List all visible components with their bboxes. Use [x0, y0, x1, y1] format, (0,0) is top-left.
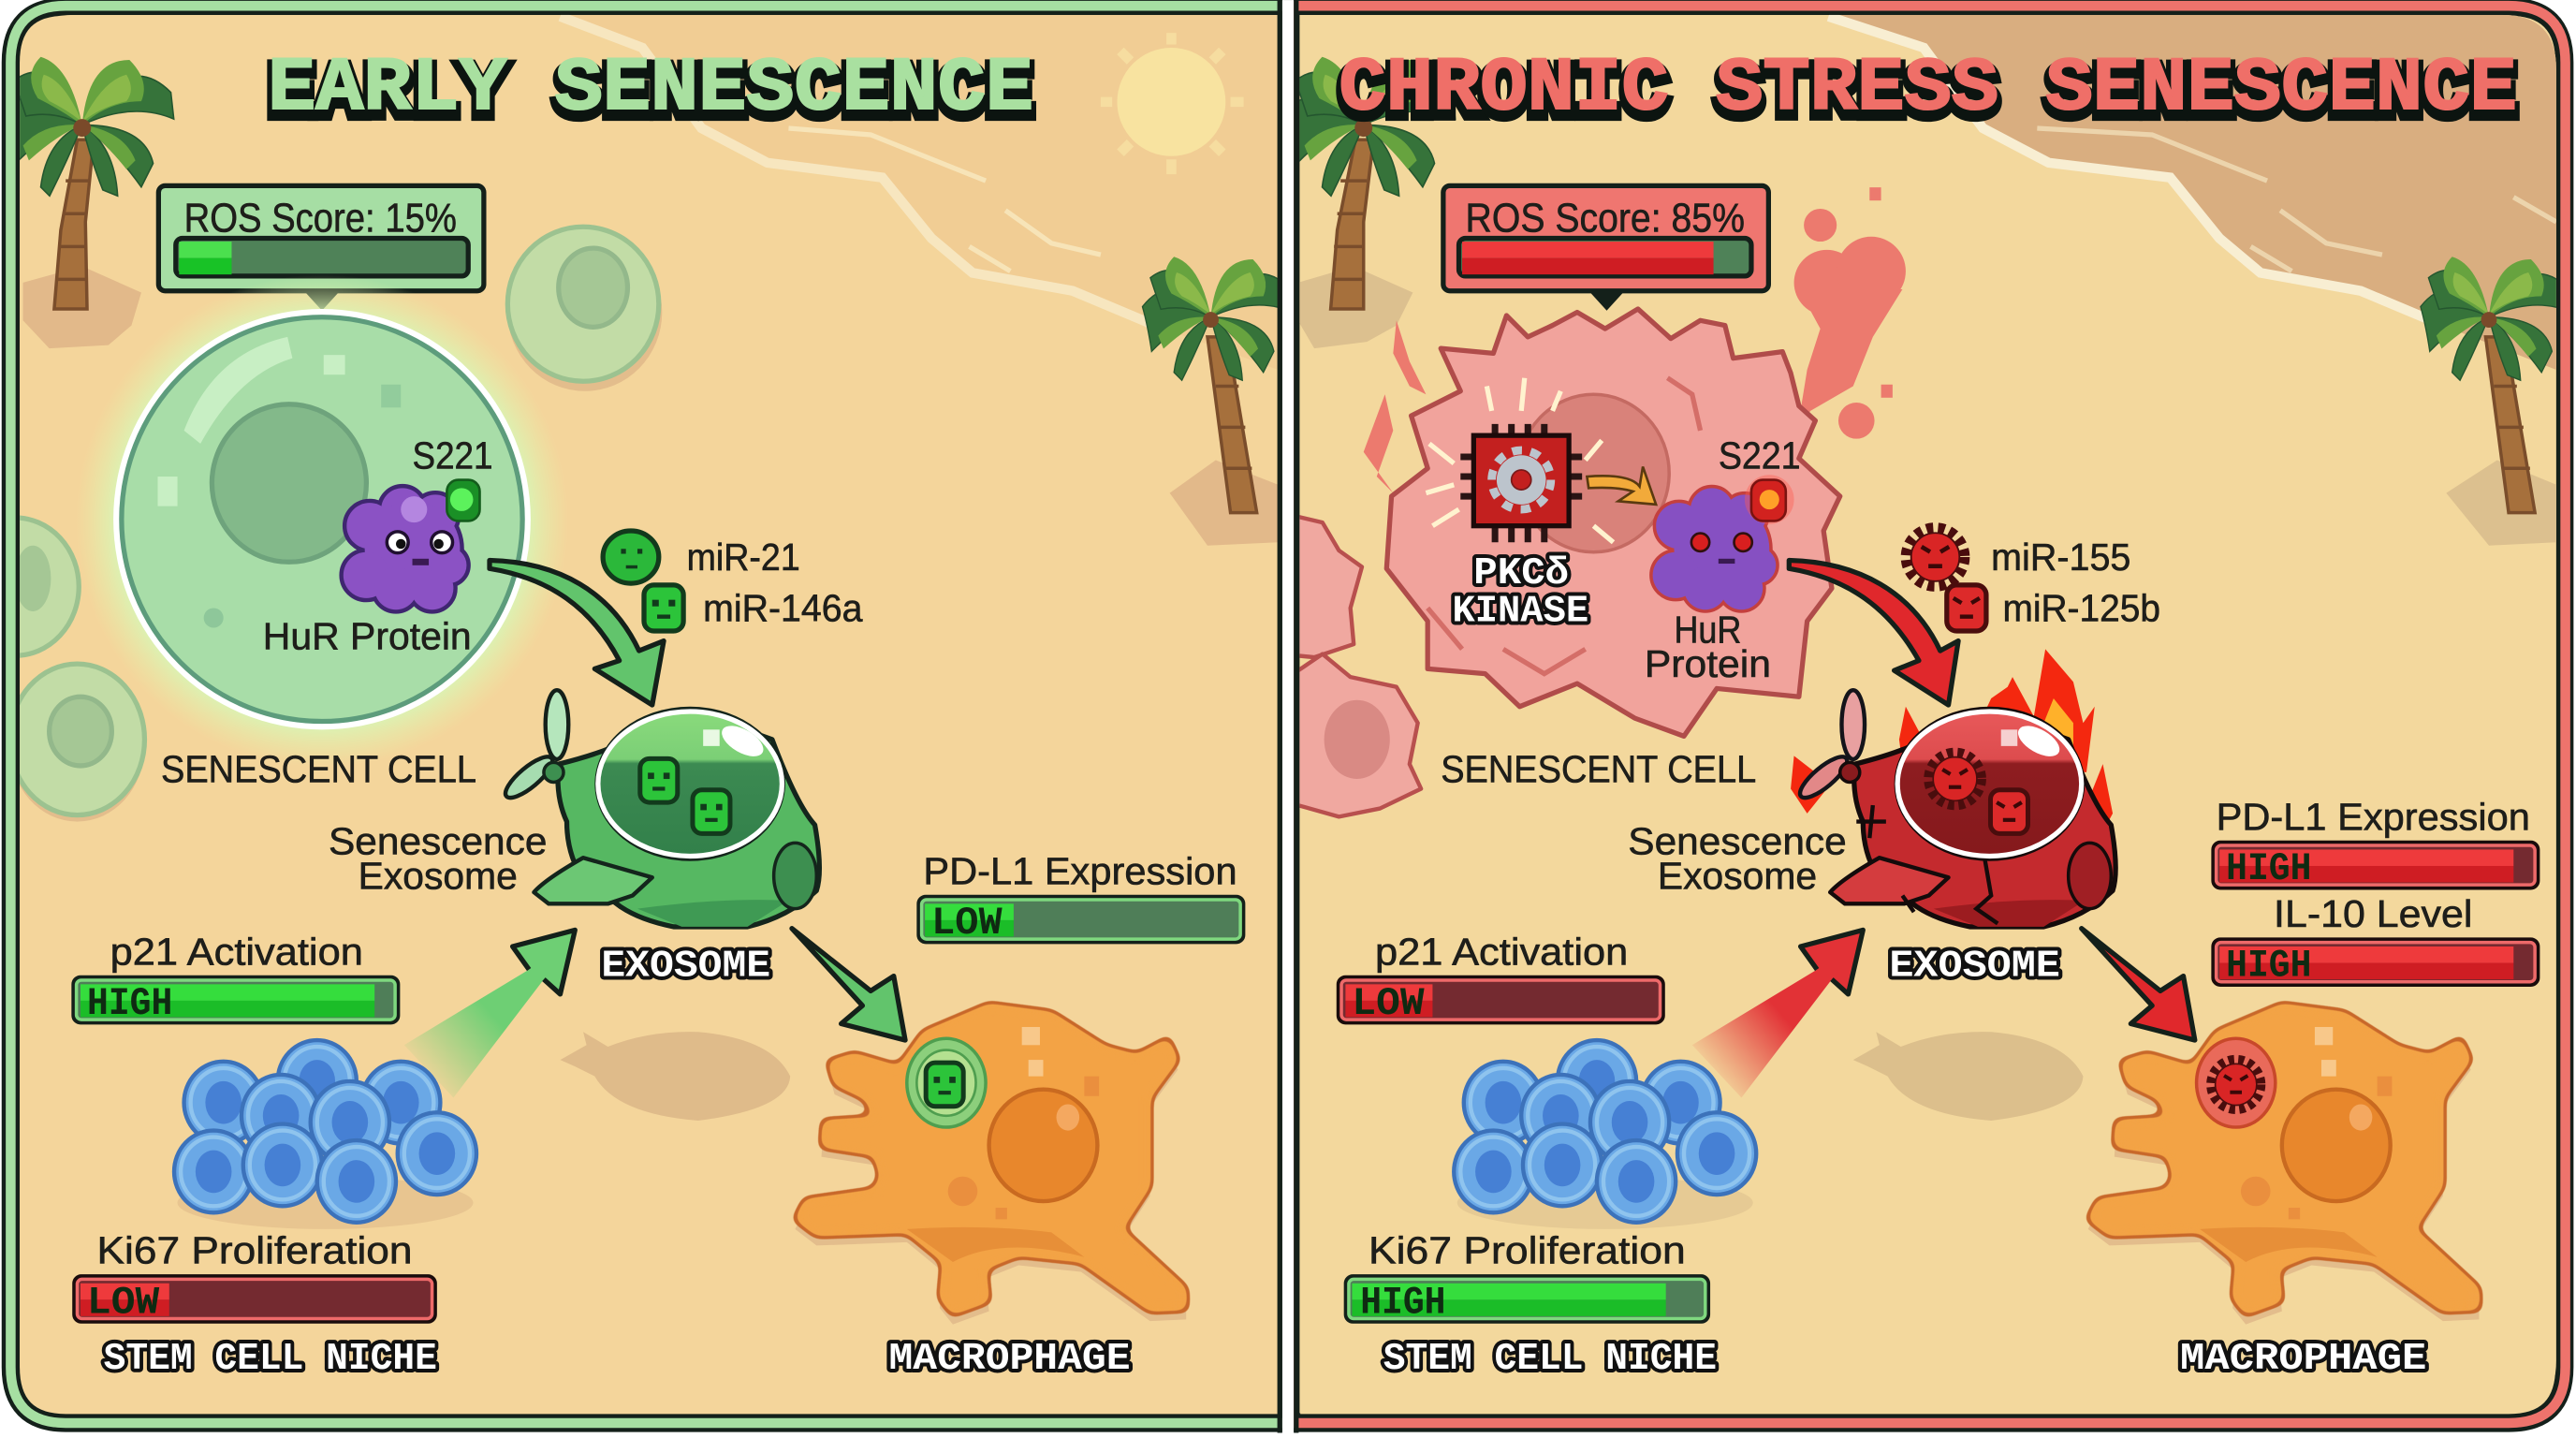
- label: exosome tag: EXOSOME: [1889, 946, 2060, 989]
- stem cell cluster: [174, 1040, 476, 1229]
- icon: palm tree right: [2421, 257, 2570, 546]
- phospho site S221 red: [1745, 475, 1794, 524]
- gauge: Ki67 proliferation low: Ki67 Proliferation: [97, 1229, 413, 1272]
- senescent cell: healthy: [76, 274, 568, 768]
- gauge: p21 activation high: HIGH: [87, 981, 172, 1026]
- callout: ROS score 15%: [158, 185, 484, 311]
- icon: miR-155: [1910, 531, 1961, 583]
- ghost cell left bottom: [10, 664, 144, 822]
- gauge: Ki67 proliferation low: LOW: [87, 1280, 160, 1325]
- shadow blob: [560, 1032, 790, 1121]
- arrow: stem cells to exosome: [404, 930, 575, 1097]
- gauge: PD-L1 expression high: HIGH: [2226, 846, 2311, 891]
- callout: ROS score 15%: ROS Score: 15%: [184, 196, 457, 242]
- label: senescence exosome: Exosome: [1658, 855, 1817, 898]
- icon: PKC delta kinase chip: [1460, 424, 1582, 542]
- panel: early senescence: [0, 6, 1293, 1423]
- gauge: p21 activation high: [74, 930, 398, 1026]
- gauge: PD-L1 expression high: PD-L1 Expression: [2217, 795, 2530, 838]
- label: miR-155: miR-155: [1991, 536, 2130, 579]
- label: PKC delta kinase: KINASE: [1453, 590, 1588, 633]
- label: PKC delta kinase: [1453, 552, 1588, 633]
- gauge: IL-10 level high: [2214, 892, 2538, 989]
- arrow: kinase to HuR: [1587, 467, 1656, 505]
- ghost cell left bottom: [1281, 654, 1421, 816]
- gauge: p21 activation low: LOW: [1352, 981, 1425, 1026]
- label: miR-21: miR-21: [687, 536, 800, 579]
- title: early senescence: EARLY SENESCENCE: [268, 53, 1033, 139]
- HuR protein: healthy: [344, 488, 466, 609]
- label: HuR protein: HuR Protein: [263, 614, 472, 657]
- label: miR-146a: miR-146a: [703, 586, 863, 629]
- arrow: cell to exosome: [1789, 561, 1958, 705]
- panel: chronic stress senescence: [1281, 6, 2570, 1423]
- icon: sun: [1101, 33, 1244, 174]
- arrow: exosome to macrophage: [792, 929, 905, 1040]
- title: chronic stress senescence: CHRONIC STRESS SENESCENCE: [1339, 53, 2517, 139]
- label: S221: S221: [413, 433, 493, 477]
- HuR protein: stressed: [1653, 488, 1776, 609]
- gauge: PD-L1 expression low: [919, 849, 1243, 946]
- exosome: damaged red ship: [1794, 690, 2115, 927]
- callout: ROS score 85%: [1443, 185, 1768, 311]
- icon: miR-146a: [644, 585, 683, 631]
- label: S221: S221: [1719, 433, 1801, 477]
- callout: ROS score 85%: ROS Score: 85%: [1466, 196, 1745, 242]
- nucleus: [1518, 394, 1669, 552]
- label: senescence exosome: [329, 820, 547, 898]
- ghost cell left middle: [20, 515, 81, 658]
- label: HuR protein: HuR: [1674, 608, 1741, 651]
- label: stem cell niche: STEM CELL NICHE: [104, 1338, 437, 1381]
- gauge: p21 activation low: p21 Activation: [1375, 930, 1628, 973]
- label: senescence exosome: Senescence: [1628, 820, 1847, 863]
- flames on exosome: [1791, 649, 2113, 838]
- label: HuR protein: [1645, 608, 1771, 685]
- macrophage: green cargo: [795, 1004, 1186, 1325]
- microRNA inside exosome: [1932, 756, 1979, 802]
- phospho site S221 green: [446, 480, 479, 521]
- label: senescence exosome: Exosome: [359, 855, 518, 898]
- label: PKC delta kinase: PKCδ: [1473, 552, 1569, 595]
- label: senescence exosome: Senescence: [329, 820, 547, 863]
- frame: right panel border: [1292, 7, 2565, 1423]
- exosome: green ship: [500, 690, 819, 927]
- gauge: Ki67 proliferation high: Ki67 Proliferation: [1368, 1229, 1686, 1272]
- title: chronic stress senescence: CHRONIC STRESS SENESCENCE: [1339, 47, 2517, 132]
- label: stem cell niche: STEM CELL NICHE: [1383, 1338, 1717, 1381]
- frame: left panel border: [10, 7, 1290, 1423]
- icon: miR-125b: [1947, 585, 1986, 631]
- arrow: exosome to macrophage: [2082, 929, 2195, 1040]
- gauge: p21 activation high: p21 Activation: [110, 930, 363, 973]
- gauge: Ki67 proliferation high: HIGH: [1360, 1280, 1445, 1325]
- gauge: PD-L1 expression low: PD-L1 Expression: [923, 849, 1237, 892]
- red ROS splash: [1364, 187, 1906, 493]
- label: miR-125b: miR-125b: [2002, 586, 2160, 629]
- macrophage: red cargo: [2088, 1004, 2479, 1325]
- icon: palm tree left: [6, 57, 174, 348]
- sparks: [1426, 378, 1614, 542]
- background: right beach: [1281, 15, 2570, 1413]
- arrow: stem cells to exosome: [1692, 930, 1863, 1097]
- label: exosome tag: EXOSOME: [601, 946, 770, 989]
- ghost cell top: [507, 227, 662, 391]
- label: HuR protein: Protein: [1645, 642, 1771, 685]
- shadow blob: [1853, 1032, 2083, 1121]
- stem cell cluster: [1454, 1040, 1756, 1229]
- gauge: Ki67 proliferation high: [1346, 1229, 1707, 1325]
- icon: palm tree right: [1142, 257, 1293, 546]
- senescent cell: stressed: [1386, 309, 1840, 736]
- label: senescence exosome: [1628, 820, 1847, 898]
- nucleus: [212, 404, 366, 562]
- icon: miR-21: [603, 531, 659, 583]
- icon: palm tree left: [1287, 57, 1456, 348]
- cell highlights: [184, 337, 292, 444]
- gauge: IL-10 level high: IL-10 Level: [2274, 892, 2472, 935]
- gauge: IL-10 level high: HIGH: [2226, 944, 2311, 989]
- title: early senescence: EARLY SENESCENCE: [268, 47, 1033, 132]
- label: senescent cell: SENESCENT CELL: [161, 747, 476, 790]
- gauge: PD-L1 expression high: [2214, 795, 2538, 891]
- label: senescent cell: SENESCENT CELL: [1441, 747, 1756, 790]
- gauge: Ki67 proliferation low: [75, 1229, 434, 1325]
- background: left beach: [0, 15, 1293, 1413]
- label: macrophage: MACROPHAGE: [889, 1338, 1131, 1381]
- label: macrophage: MACROPHAGE: [2180, 1338, 2426, 1381]
- microRNA inside exosome: [640, 758, 678, 802]
- gauge: p21 activation low: [1339, 930, 1662, 1026]
- ghost cell left middle: [1299, 515, 1365, 659]
- arrow: cell to exosome: [490, 561, 664, 705]
- gauge: PD-L1 expression low: LOW: [931, 901, 1003, 946]
